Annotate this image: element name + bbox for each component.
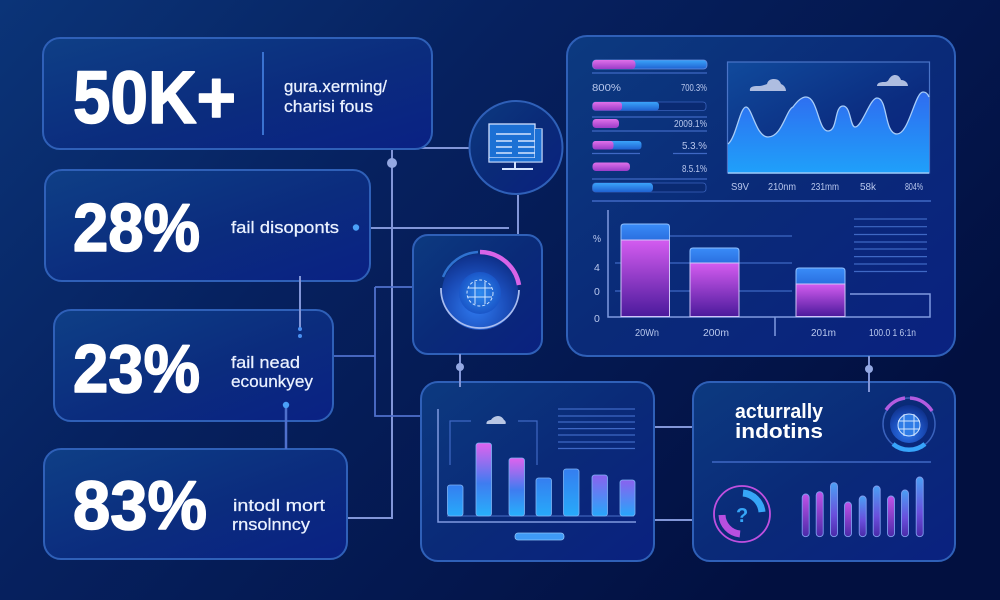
stat description: rnsolnncy <box>232 516 311 534</box>
gauge ring <box>441 252 519 330</box>
stat description: ecounkyey <box>231 373 314 391</box>
bar chart x axis labels <box>635 327 916 339</box>
bar chart y axis labels: 0 <box>594 286 600 298</box>
bar chart y axis labels: 0 <box>594 313 600 325</box>
bar chart x axis labels: 200m <box>703 327 729 339</box>
stat description: fail disoponts <box>231 219 339 237</box>
area chart axis labels: 231mm <box>811 181 839 193</box>
stat description <box>284 78 387 116</box>
bar chart x axis labels: 100.0 1 6:1n <box>869 327 916 339</box>
panel: 28% stat <box>45 170 370 281</box>
stat description: fail nead <box>231 354 300 372</box>
panel: bar chart card <box>421 382 654 561</box>
progress bars <box>592 60 707 192</box>
bar chart x axis labels: 201m <box>811 327 836 339</box>
pill button <box>515 533 564 540</box>
bar chart x axis labels: 20Wn <box>635 327 659 339</box>
stat value: 83%: 83% <box>73 467 207 544</box>
bar 3 <box>796 268 845 316</box>
bar chart y axis labels: 4 <box>594 262 600 274</box>
area chart axis labels: 804% <box>905 181 923 193</box>
progress bar labels: 5.3.% <box>682 140 707 152</box>
connector dot <box>353 224 359 231</box>
area chart axis labels: S9V <box>731 181 749 193</box>
stat description: charisi fous <box>284 98 373 116</box>
stat description <box>231 354 314 391</box>
bar 2 <box>690 248 739 316</box>
icon: monitor in circle <box>470 101 562 194</box>
stat description: gura.xerming/ <box>284 78 387 96</box>
progress bar labels <box>592 82 707 175</box>
area chart axis labels: 210nm <box>768 181 796 193</box>
icon: cloud right <box>877 75 908 86</box>
icon: cloud left <box>750 79 786 91</box>
bar chart y axis labels <box>593 233 601 325</box>
panel: analytics dashboard <box>567 36 955 356</box>
progress bar labels: 2009.1% <box>674 118 707 130</box>
area chart axis labels: 58k <box>860 181 877 193</box>
area chart axis labels <box>731 181 923 193</box>
stacked bar chart <box>608 210 930 336</box>
bar 1 <box>621 224 670 316</box>
icon: question gauge: ? <box>736 505 748 527</box>
panel: 23% stat <box>54 310 333 421</box>
connector lines <box>333 148 693 520</box>
card heading: indotins <box>735 421 823 443</box>
icon: globe ring <box>883 398 935 450</box>
stat value: 50K+: 50K+ <box>73 56 236 139</box>
progress bar labels: 700.3% <box>681 82 707 94</box>
column bars <box>448 443 635 516</box>
panel: insights card <box>693 382 955 561</box>
area chart <box>728 62 930 173</box>
progress bar labels: 8.5.1% <box>682 163 707 175</box>
panel: 50K+ stat <box>43 38 432 149</box>
connectors overlapping panels <box>283 276 873 449</box>
stat value: 28%: 28% <box>73 190 200 266</box>
panel: 83% stat <box>44 449 347 559</box>
icon: cloud <box>486 416 506 424</box>
stat description: intodl mort <box>233 497 325 515</box>
column bars <box>802 477 923 537</box>
progress bar labels: 800% <box>592 82 621 94</box>
panel: gauge card <box>413 235 542 354</box>
stat value: 23%: 23% <box>73 331 200 407</box>
bar chart y axis labels: % <box>593 233 601 245</box>
stat description <box>232 497 325 534</box>
icon: question gauge <box>714 486 770 542</box>
card heading <box>735 401 824 443</box>
card heading: acturrally <box>735 401 824 423</box>
